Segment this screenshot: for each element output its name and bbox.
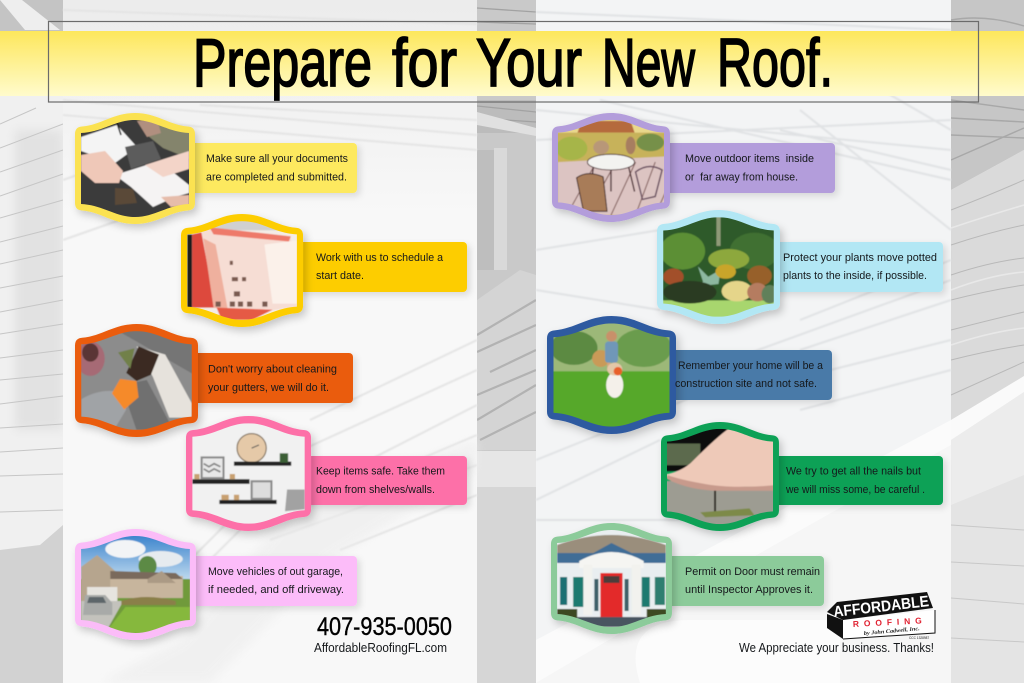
text: Move vehicles of out garage, xyxy=(208,566,343,578)
badge xyxy=(75,324,198,437)
badge xyxy=(551,523,672,634)
title: Your xyxy=(476,25,582,101)
logo: Affordable Roofing: ROOFING xyxy=(853,615,922,629)
logo: Affordable Roofing: CCC 1328987 xyxy=(909,636,929,640)
label box xyxy=(664,143,835,193)
title: Roof. xyxy=(717,25,833,101)
label box xyxy=(668,350,832,400)
text: We try to get all the nails but xyxy=(786,466,922,478)
text: Don't worry about cleaning xyxy=(208,364,337,376)
label box xyxy=(188,143,357,193)
panel: documents xyxy=(75,113,357,224)
label box xyxy=(774,456,943,505)
label box xyxy=(664,556,824,606)
panel: gutters xyxy=(75,324,353,437)
label box xyxy=(300,456,467,505)
website: AffordableRoofingFL.com xyxy=(314,641,447,655)
text: Protect your plants move potted xyxy=(783,252,937,264)
text: Remember your home will be a xyxy=(678,360,824,372)
text: Make sure all your documents xyxy=(206,153,348,165)
label box xyxy=(190,353,353,403)
text: start date. xyxy=(316,270,364,282)
text: plants to the inside, if possible. xyxy=(783,270,927,282)
badge xyxy=(75,113,195,224)
label box xyxy=(188,556,357,606)
title: Prepare xyxy=(193,25,372,101)
text: Permit on Door must remain xyxy=(685,566,820,578)
badge xyxy=(186,416,311,531)
panel: permit xyxy=(551,523,824,634)
title: for xyxy=(392,25,457,101)
title xyxy=(193,25,833,101)
badge xyxy=(181,214,303,327)
badge xyxy=(657,210,780,324)
panel: vehicles xyxy=(75,529,357,640)
thank-you note: We Appreciate your business. Thanks! xyxy=(739,640,934,655)
title: New xyxy=(602,25,696,101)
panel: nails xyxy=(661,422,943,531)
text: are completed and submitted. xyxy=(206,172,347,184)
panel: schedule xyxy=(181,214,467,327)
text: your gutters, we will do it. xyxy=(208,382,329,394)
logo: Affordable Roofing: AFFORDABLE xyxy=(833,593,930,621)
text: Move outdoor items inside xyxy=(685,153,814,165)
title band xyxy=(0,31,1024,96)
text: Work with us to schedule a xyxy=(316,252,444,264)
label box xyxy=(298,242,467,292)
text: if needed, and off driveway. xyxy=(208,584,344,596)
badge xyxy=(661,422,779,531)
panel: construction site xyxy=(547,316,832,434)
logo: Affordable Roofing xyxy=(827,592,935,640)
badge xyxy=(552,113,670,222)
text: we will miss some, be careful . xyxy=(785,484,925,496)
panel: shelves xyxy=(186,416,467,531)
panel: plants xyxy=(657,210,943,324)
phone number: 407-935-0050 xyxy=(317,613,452,641)
title frame xyxy=(48,22,978,102)
panel: outdoor items xyxy=(552,113,835,222)
text: construction site and not safe. xyxy=(675,378,817,390)
text: Keep items safe. Take them xyxy=(316,466,445,478)
badge xyxy=(547,316,676,434)
label box xyxy=(774,242,943,292)
text: down from shelves/walls. xyxy=(316,484,435,496)
logo: Affordable Roofing: by John Cadwell, Inc. xyxy=(864,626,920,637)
badge xyxy=(75,529,196,640)
text: or far away from house. xyxy=(685,172,798,184)
text: until Inspector Approves it. xyxy=(685,584,813,596)
